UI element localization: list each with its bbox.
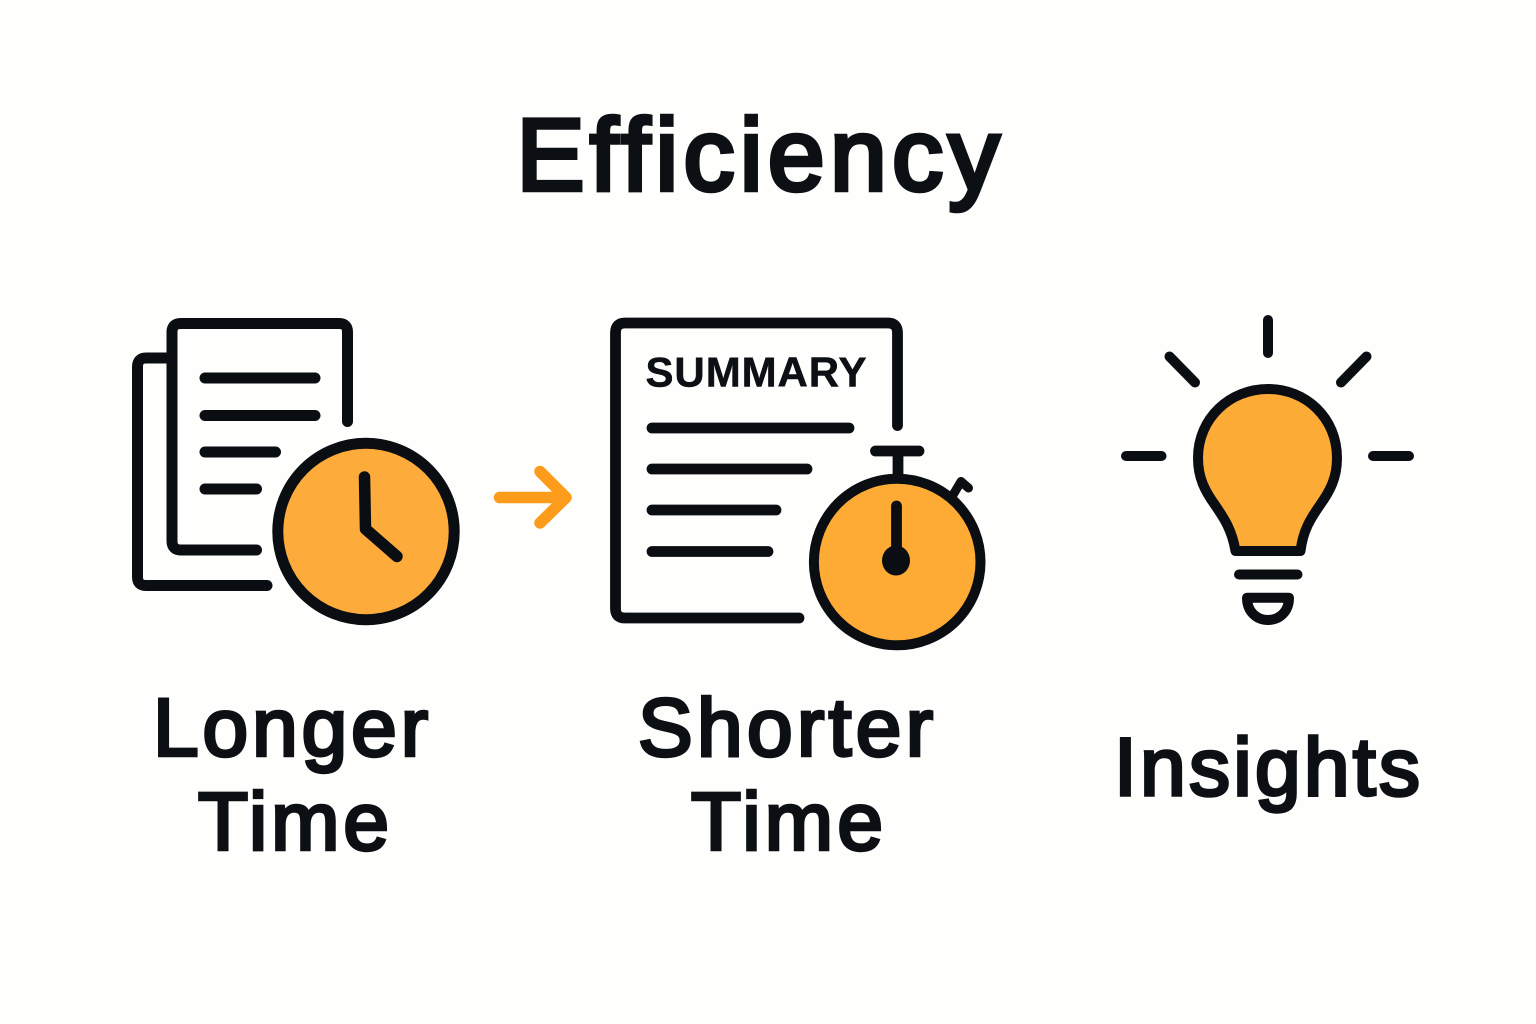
- label: longer time: Longer: [153, 682, 428, 774]
- label: shorter time: Shorter: [638, 682, 933, 774]
- icon: documents with clock: [138, 324, 454, 620]
- title: Efficiency: [516, 98, 1000, 212]
- summary label: SUMMARY: [646, 348, 866, 396]
- label: shorter time: [638, 682, 933, 868]
- label: insights: Insights: [1114, 722, 1420, 813]
- label: longer time: Time: [198, 776, 389, 868]
- label: shorter time: Time: [691, 776, 883, 868]
- icon: summary with stopwatch: [616, 323, 980, 645]
- arrow: [500, 472, 566, 523]
- label: longer time: [153, 682, 428, 868]
- icon: light bulb: [1126, 320, 1409, 620]
